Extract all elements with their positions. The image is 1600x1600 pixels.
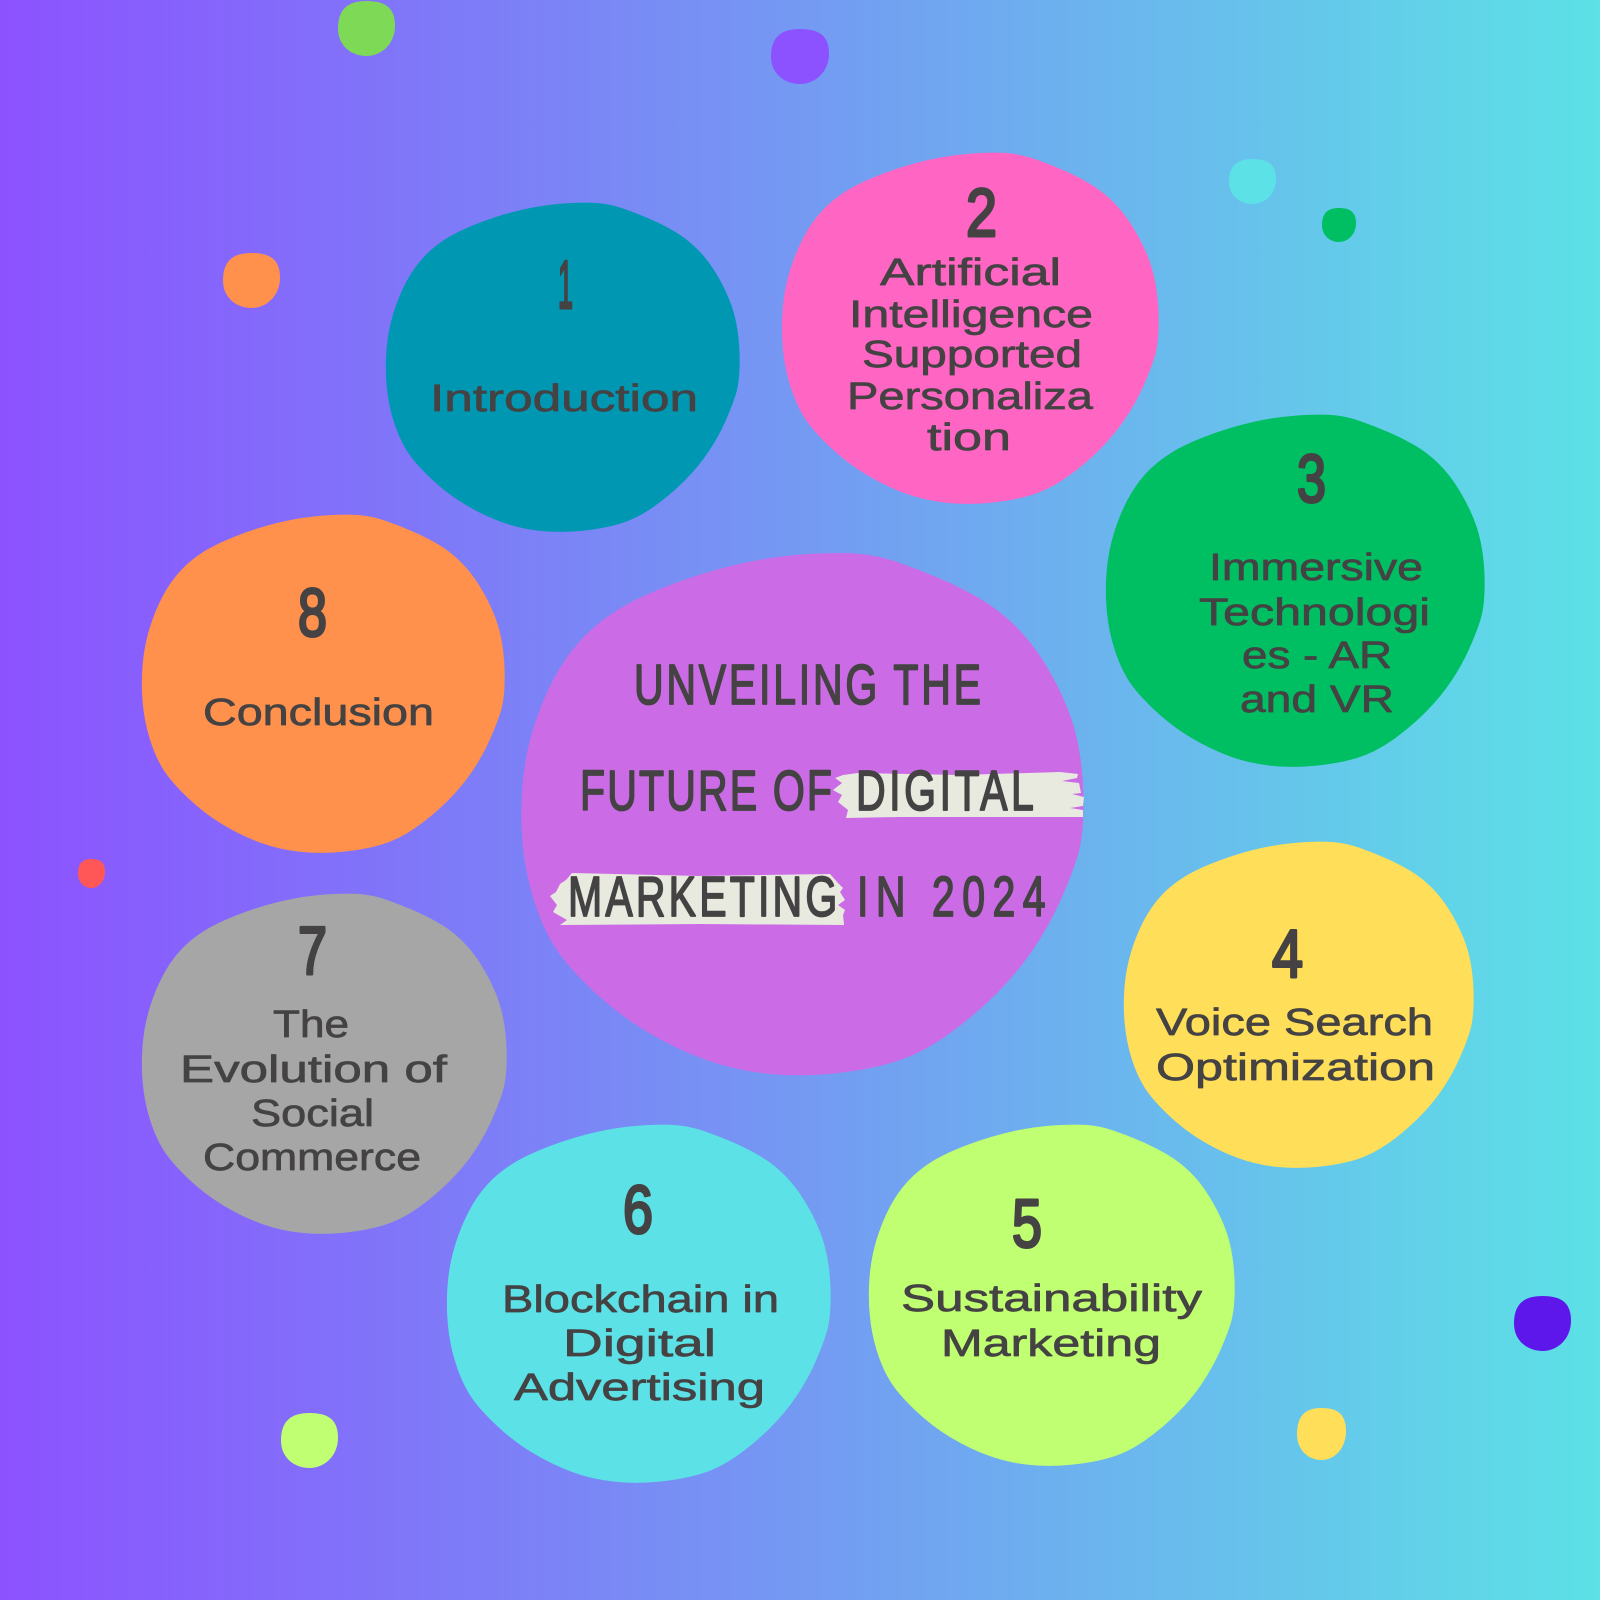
panel: 2 artificial intelligence: Artificial xyxy=(880,252,1061,294)
title text: FUTURE OF xyxy=(580,758,832,823)
panel: 5 sustainability marketing: Sustainability xyxy=(901,1278,1202,1320)
panel: 6 blockchain: 6 xyxy=(623,1172,653,1248)
panel: 1 introduction: Introduction xyxy=(430,378,698,420)
panel: 2 artificial intelligence xyxy=(782,153,1159,504)
title text: UNVEILING THE xyxy=(634,652,981,717)
title text: MARKETING xyxy=(568,864,837,929)
panel: 3 immersive technologies: and VR xyxy=(1240,679,1394,721)
panel: 2 artificial intelligence: Intelligence xyxy=(849,294,1093,336)
panel: 8 conclusion: 8 xyxy=(298,575,327,651)
panel: 3 immersive technologies: 3 xyxy=(1297,441,1326,517)
panel: 3 immersive technologies: es - AR xyxy=(1242,635,1392,677)
highlight: marketing xyxy=(550,873,845,925)
title text: IN 2024 xyxy=(857,864,1046,929)
panel: 6 blockchain: Digital xyxy=(563,1323,716,1365)
center blob xyxy=(521,553,1084,1075)
panel: 3 immersive technologies: Immersive xyxy=(1209,547,1423,589)
panel: 8 conclusion: Conclusion xyxy=(203,692,434,734)
panel: 8 conclusion xyxy=(142,515,505,853)
title text xyxy=(568,652,1046,929)
panel: 5 sustainability marketing xyxy=(869,1125,1235,1466)
panel: 4 voice search: Optimization xyxy=(1156,1047,1435,1089)
panel: 2 artificial intelligence: Supported xyxy=(862,334,1082,376)
panel: 2 artificial intelligence: tion xyxy=(927,417,1011,459)
panel: 7 social commerce: 7 xyxy=(298,913,327,989)
panel: 7 social commerce: Commerce xyxy=(203,1137,421,1179)
panel: 4 voice search: Voice Search xyxy=(1156,1002,1433,1044)
panel: center title xyxy=(521,553,1084,1075)
panel: 7 social commerce: Social xyxy=(251,1093,374,1135)
title text: DIGITAL xyxy=(856,758,1034,823)
panel: 6 blockchain: Blockchain in xyxy=(502,1279,779,1321)
panel: 1 introduction: 1 xyxy=(558,247,573,323)
panel: 2 artificial intelligence: Personaliza xyxy=(847,376,1094,418)
panel: 6 blockchain xyxy=(447,1125,831,1483)
panel: 6 blockchain: Advertising xyxy=(514,1367,765,1409)
panel: 4 voice search: 4 xyxy=(1272,916,1303,992)
panel: 4 voice search xyxy=(1124,842,1474,1168)
panel: 7 social commerce: The xyxy=(273,1004,349,1046)
panel: 3 immersive technologies xyxy=(1106,415,1485,767)
panel: 1 introduction xyxy=(386,203,740,532)
panel: 5 sustainability marketing: Marketing xyxy=(941,1323,1161,1365)
highlight: digital xyxy=(833,772,1084,818)
panel: 2 artificial intelligence: 2 xyxy=(966,175,997,251)
panel: 7 social commerce: Evolution of xyxy=(180,1049,448,1091)
panel: 3 immersive technologies: Technologi xyxy=(1199,592,1430,634)
panel: 7 social commerce xyxy=(142,894,507,1234)
panel: 5 sustainability marketing: 5 xyxy=(1012,1186,1042,1262)
